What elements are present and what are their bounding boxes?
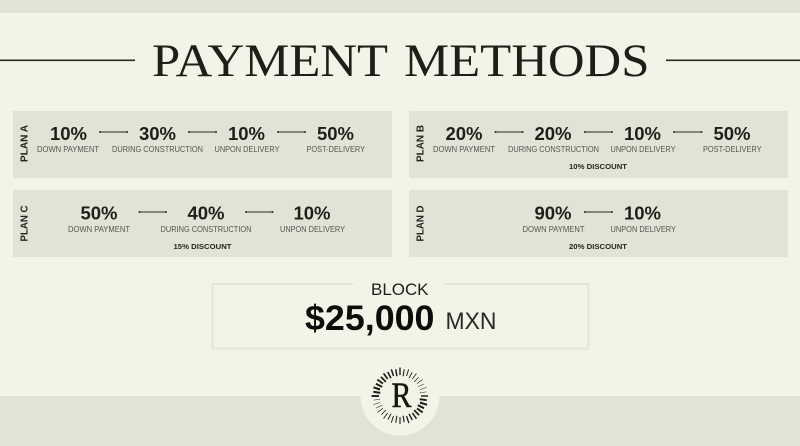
plan C step 1 (68, 202, 130, 234)
block label: BLOCK (371, 281, 428, 299)
plan B step 2: DURING CONSTRUCTION (508, 144, 599, 154)
arrow (138, 211, 167, 213)
plan C step 3: 10% (293, 202, 331, 224)
plan C label: PLAN C (18, 205, 30, 242)
plan C step 2 (160, 202, 252, 234)
plan A step 2 (112, 123, 203, 154)
logo badge (360, 356, 440, 436)
plan A label: PLAN A (18, 125, 30, 162)
icon: sunburst ring (372, 368, 428, 424)
arrow (99, 131, 128, 133)
plan C discount: 15% DISCOUNT (174, 242, 232, 251)
plan B step 3: UNPON DELIVERY (610, 144, 676, 154)
plan D discount: 20% DISCOUNT (569, 242, 627, 251)
plan A step 4 (306, 123, 365, 154)
title (0, 35, 800, 87)
panel: plan B (409, 111, 788, 178)
price box (212, 281, 588, 348)
plan A step 1: 10% (50, 123, 87, 144)
panel: plan C (13, 190, 392, 257)
arrow (584, 211, 613, 213)
plan C step 1: 50% (80, 202, 118, 224)
plan D step 2: UNPON DELIVERY (610, 224, 676, 234)
plan D step 1: 90% (534, 202, 572, 224)
arrow (245, 211, 274, 213)
plan B step 4: 50% (713, 123, 751, 144)
icon: R monogram: R (392, 375, 412, 415)
plan B step 4: POST-DELIVERY (703, 144, 762, 154)
plan D step 2 (610, 202, 676, 234)
plan A step 2: DURING CONSTRUCTION (112, 144, 203, 154)
plan A step 3 (214, 123, 280, 154)
title: PAYMENT (152, 35, 388, 87)
plan B label: PLAN B (414, 125, 426, 162)
plan C step 3: UNPON DELIVERY (280, 224, 345, 234)
plan D label: PLAN D (414, 205, 426, 242)
plan B step 4 (703, 123, 762, 154)
arrow (188, 131, 217, 133)
plan C step 2: DURING CONSTRUCTION (160, 224, 252, 234)
top band (0, 0, 800, 13)
plan C step 2: 40% (187, 202, 225, 224)
arrow (494, 131, 524, 133)
plan D step 1 (522, 202, 584, 234)
plan A step 4: 50% (317, 123, 354, 144)
arrow (673, 131, 702, 133)
plan C step 1: DOWN PAYMENT (68, 224, 130, 234)
price: $25,000 (305, 299, 434, 338)
plan D step 2: 10% (624, 202, 661, 224)
plan D step 1: DOWN PAYMENT (522, 224, 584, 234)
arrow (277, 131, 306, 133)
plan A step 3: 10% (228, 123, 265, 144)
plan B step 2: 20% (534, 123, 572, 144)
panel: plan A (13, 111, 392, 178)
panel: plan D (409, 190, 788, 257)
plan A step 2: 30% (139, 123, 176, 144)
plan A step 1 (37, 123, 99, 154)
currency: MXN (446, 308, 496, 335)
plan B discount: 10% DISCOUNT (569, 162, 627, 171)
plan C step 3 (280, 202, 345, 234)
plan A step 4: POST-DELIVERY (306, 144, 365, 154)
bottom band (0, 396, 800, 446)
plan B step 1: DOWN PAYMENT (433, 144, 495, 154)
plan B step 3: 10% (624, 123, 661, 144)
plan B step 3 (610, 123, 676, 154)
plan B step 2 (508, 123, 599, 154)
plan B step 1: 20% (445, 123, 483, 144)
plan B step 1 (433, 123, 495, 154)
plan A step 3: UNPON DELIVERY (214, 144, 280, 154)
title: METHODS (404, 35, 650, 87)
arrow (584, 131, 613, 133)
plan A step 1: DOWN PAYMENT (37, 144, 99, 154)
